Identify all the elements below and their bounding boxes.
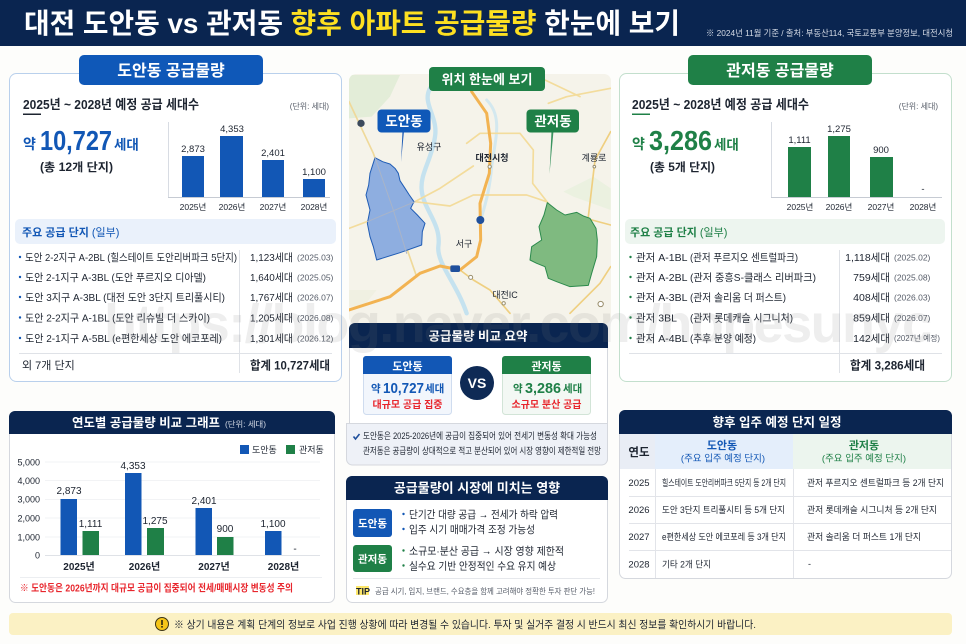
bar chart: 관저동: - — [921, 184, 925, 195]
grouped bar chart: 4,353 — [120, 461, 146, 472]
schedule rows — [628, 469, 951, 578]
list: 도안동: (2025.05) — [297, 272, 334, 282]
warning note: ※ 도안동은 2026년까지 대규모 공급이 집중되어 전세/매매시장 변동성 주의 — [20, 582, 293, 594]
map labels: 유성구 — [417, 142, 441, 152]
heading: 관저동 — [688, 55, 872, 85]
source note: ※ 2024년 11월 기준 / 출처: 부동산114, 국토교통부 분양정보, 대전시청 — [706, 28, 953, 38]
legend — [240, 445, 324, 455]
schedule rows: 도안 3단지 트리풀시티 등 5개 단지 — [662, 505, 785, 515]
tag: 관저동 — [353, 545, 392, 572]
schedule columns: (주요 입주 예정 단지) — [822, 452, 906, 464]
list heading: 관저동 — [625, 219, 945, 244]
grouped bar chart — [17, 458, 320, 573]
title banner — [0, 0, 966, 46]
list: 관저동: 408세대 — [853, 292, 890, 304]
list: 도안동: 도안 2-2지구 A-2BL (힐스테이트 도안리버파크 5단지) — [25, 251, 237, 264]
bar chart: 도안동: 2027년 — [260, 202, 286, 212]
list: 관저동: (관저 중흥S-클래스 리버파크) — [690, 271, 816, 284]
schedule rows: 2026 — [628, 505, 650, 516]
icon: warning — [156, 618, 168, 630]
list: 관저동: 142세대 — [853, 333, 890, 345]
grouped bar chart: 1,100 — [260, 519, 286, 530]
tag: 도안동: 도안동 — [358, 518, 387, 530]
list: 관저동: (2025.08) — [894, 272, 931, 282]
total: 관저동: 3,286 — [649, 125, 712, 156]
bar chart: 도안동: 2026년 — [219, 202, 245, 212]
summary header: 공급물량 비교 요약 — [429, 330, 528, 344]
card: 도안동: 세대 — [425, 382, 444, 395]
grouped bar chart: 2,000 — [17, 514, 40, 524]
card: 도안동 — [363, 356, 452, 414]
list: 도안동: (2025.03) — [297, 252, 334, 262]
bar chart: 도안동: 2,873 — [181, 144, 205, 155]
list: 관저동: 관저 A-1BL — [636, 252, 688, 264]
list: 관저동: 859세대 — [853, 312, 890, 324]
map labels: 계룡로 — [582, 152, 606, 163]
heading: 도안동: 도안동 공급물량 — [117, 62, 225, 80]
grouped bar chart: 2027년 — [198, 560, 230, 573]
list: 관저동: 관저 A-2BL — [636, 272, 688, 284]
card: 관저동: 관저동 — [531, 359, 562, 373]
watermark: https://blog.naver.com/hopesunyc — [104, 294, 932, 354]
grouped bar chart: 2,401 — [191, 496, 217, 507]
card: 관저동: 세대 — [563, 382, 582, 395]
impact text: 도안동: 단기간 대량 공급 → 전세가 하락 압력 — [409, 508, 558, 521]
callout: 도안동 — [378, 110, 430, 162]
tag: 도안동 — [353, 509, 392, 537]
card: 관저동: 약 — [513, 382, 523, 395]
subtitle: 2025년 ~ 2028년 예정 공급 세대수 — [23, 97, 199, 112]
schedule rows: 2028 — [628, 560, 650, 570]
footer notice — [9, 613, 952, 635]
schedule rows: 2025 — [628, 478, 650, 489]
grouped bar chart: 1,000 — [17, 532, 40, 542]
schedule columns: 연도 — [628, 446, 650, 459]
unit: (단위: 세대) — [899, 101, 938, 111]
callout: 도안동: 도안동 — [385, 114, 423, 129]
schedule rows: - — [808, 559, 811, 569]
list: 도안동: 1,767세대 — [250, 292, 293, 304]
list: 관저동: 759세대 — [853, 272, 890, 284]
callout: 관저동 — [526, 110, 579, 174]
total: 관저동: (총 5개 단지) — [650, 161, 715, 174]
grouped bar chart: 1,275 — [142, 516, 168, 527]
card: 관저동 — [502, 356, 591, 414]
grouped bar chart: 1,111 — [79, 519, 103, 530]
bar chart: 관저동 — [771, 122, 942, 212]
impact text: 도안동: 입주 시기 매매가격 조정 가능성 — [409, 523, 535, 536]
callout: 관저동: 관저동 — [534, 114, 572, 129]
list: 도안동: 합계 10,727세대 — [250, 358, 330, 372]
bar chart: 도안동: 2025년 — [180, 202, 206, 212]
schedule rows: 관저 롯데캐슬 시그니처 등 2개 단지 — [807, 504, 937, 515]
total: 관저동 — [632, 125, 739, 174]
schedule rows: 힐스테이트 도안리버파크 5단지 등 2개 단지 — [662, 477, 786, 488]
total: 관저동: 약 — [632, 136, 645, 152]
panel: 위치 지도 — [349, 67, 611, 324]
list: 관저동: 관저 A-4BL — [636, 333, 688, 345]
impact header — [346, 476, 608, 500]
panel: 시장 영향 — [346, 476, 608, 602]
list heading: 관저동: 주요 공급 단지 (일부) — [630, 225, 727, 239]
list: 관저동: (2026.03) — [894, 292, 931, 302]
card: 도안동: 도안동 — [392, 360, 423, 373]
bar chart: 관저동: 2025년 — [787, 202, 813, 212]
schedule header — [619, 410, 952, 434]
list heading: 도안동: 주요 공급 단지 (일부) — [22, 225, 119, 239]
bar chart: 관저동: 2027년 — [868, 202, 894, 212]
grouped bar chart: 2025년 — [63, 560, 95, 573]
subtitle: 2025년 ~ 2028년 예정 공급 세대수 — [632, 97, 809, 112]
bar chart: 관저동: 1,275 — [827, 124, 851, 135]
list: 관저동: (추후 분양 예정) — [690, 332, 756, 345]
heading: 도안동 — [79, 55, 263, 85]
list: 도안동: 1,640세대 — [250, 272, 293, 284]
list: 도안동: 도안 3지구 A-3BL (대전 도안 3단지 트리풀시티) — [25, 292, 225, 304]
card: 관저동: 소규모 분산 공급 — [512, 398, 581, 411]
map labels — [417, 142, 606, 300]
bar chart: 도안동: 4,353 — [220, 124, 244, 135]
grouped bar chart: 2026년 — [129, 560, 160, 573]
list: 관저동: 합계 3,286세대 — [850, 358, 925, 372]
card: 관저동: 3,286 — [525, 380, 561, 397]
grouped bar chart: 4,000 — [17, 476, 40, 486]
list: 관저동: 관저 A-3BL — [636, 292, 688, 304]
panel: 도안동 공급물량 — [10, 55, 342, 382]
grouped bar chart: 2028년 — [268, 560, 299, 573]
list: 도안동: (2026.12) — [297, 334, 334, 344]
legend: 도안동 — [252, 445, 277, 455]
list: 관저동: (관저 롯데캐슬 시그니처) — [690, 312, 793, 324]
total: 도안동: (총 12개 단지) — [40, 161, 113, 174]
footer text: ※ 상기 내용은 계획 단계의 정보로 사업 진행 상황에 따라 변경될 수 있습니다. 투자 및 실거주 결정 시 반드시 최신 정보를 확인하시기 바랍니다. — [174, 618, 756, 631]
card: 도안동: 10,727 — [383, 380, 424, 397]
grouped bar chart: 900 — [217, 524, 234, 535]
schedule rows: 관저 푸르지오 센트럴파크 등 2개 단지 — [807, 478, 944, 488]
grouped bar chart: 2,873 — [56, 486, 82, 497]
map labels: 대전IC — [492, 290, 518, 300]
panel: 입주 예정 일정 — [619, 410, 952, 578]
list: 관저동: (2027년 예정) — [894, 333, 940, 343]
total: 도안동 — [23, 125, 139, 174]
unit: (단위: 세대) — [290, 101, 329, 111]
list: 관저동: 1,118세대 — [845, 252, 890, 264]
summary notes: 관저동은 공급량이 상대적으로 적고 분산되어 있어 시장 영향이 제한적일 전망 — [363, 445, 601, 456]
schedule columns: 도안동 — [707, 439, 737, 452]
list: 도안동: 도안 2-2지구 A-1BL (도안 리슈빌 더 스카이) — [25, 312, 210, 324]
list: 도안동: (2026.07) — [297, 292, 334, 302]
vs badge — [460, 366, 494, 400]
schedule rows: 관저 솔리움 더 퍼스트 1개 단지 — [807, 532, 921, 542]
list: 도안동: 도안 2-1지구 A-5BL (e편한세상 도안 에코포레) — [25, 332, 222, 345]
impact header: 공급물량이 시장에 미치는 영향 — [394, 480, 560, 496]
total: 관저동: 세대 — [714, 138, 739, 152]
list: 관저동: (2026.07) — [894, 313, 931, 323]
grouped bar chart: 3,000 — [17, 494, 40, 504]
total: 도안동: 세대 — [114, 138, 139, 152]
schedule rows: 2027 — [628, 532, 650, 543]
schedule header: 향후 입주 예정 단지 일정 — [713, 414, 841, 430]
list: 도안동: 1,301세대 — [250, 333, 293, 345]
list: 관저동: (2025.02) — [894, 252, 931, 262]
grouped bar chart: 5,000 — [17, 458, 40, 468]
title: 대전 도안동 vs 관저동 향후 아파트 공급물량 한눈에 보기 — [24, 8, 680, 39]
summary notes — [346, 424, 608, 465]
list: 관저동 — [629, 250, 942, 373]
impact text: 도안동 — [402, 508, 558, 536]
impact text: 관저동: 실수요 기반 안정적인 수요 유지 예상 — [409, 560, 556, 572]
grouped bar chart: 0 — [35, 550, 40, 560]
total: 도안동: 10,727 — [40, 125, 112, 156]
impact text: 관저동: 소규모·분산 공급 → 시장 영향 제한적 — [409, 546, 564, 558]
legend: 관저동 — [299, 445, 324, 455]
vs badge: VS — [468, 375, 486, 391]
tip: 공급 시기, 입지, 브랜드, 수요층을 함께 고려해야 정확한 투자 판단 가능! — [375, 586, 595, 596]
chart header — [9, 411, 335, 434]
chart header: 연도별 공급물량 비교 그래프 — [72, 415, 220, 430]
list: 도안동: 외 7개 단지 — [22, 359, 75, 372]
schedule rows: 기타 2개 단지 — [662, 560, 711, 570]
list: 도안동 — [19, 250, 334, 373]
schedule rows: e편한세상 도안 에코포레 등 3개 단지 — [662, 531, 786, 542]
bar chart: 관저동: 2028년 — [910, 202, 936, 212]
map labels: 서구 — [456, 239, 472, 249]
card: 도안동: 대규모 공급 집중 — [373, 398, 442, 411]
grouped bar chart: - — [293, 544, 297, 555]
panel: 관저동 공급물량 — [620, 55, 952, 382]
tip: TIP — [356, 586, 370, 596]
tag: 관저동: 관저동 — [358, 552, 387, 566]
summary notes: 도안동은 2025-2026년에 공급이 집중되어 있어 전세기 변동성 확대 가능성 — [363, 430, 597, 441]
panel: 공급물량 비교 요약 — [346, 323, 608, 465]
list: 도안동: 1,123세대 — [250, 252, 293, 264]
list: 도안동: 1,205세대 — [250, 312, 293, 324]
list: 도안동: (2026.08) — [297, 313, 334, 323]
impact text: 관저동 — [402, 546, 564, 572]
bar chart: 도안동: 2028년 — [301, 202, 327, 212]
bar chart: 관저동: 2026년 — [826, 202, 852, 212]
heading: 위치 한눈에 보기 — [429, 67, 545, 91]
list: 관저동: (관저 솔리움 더 퍼스트) — [690, 292, 786, 304]
heading: 위치 한눈에 보기: 위치 한눈에 보기 — [442, 72, 532, 87]
bar chart: 도안동: 2,401 — [261, 148, 285, 159]
schedule columns — [620, 434, 951, 469]
list heading: 도안동 — [15, 219, 336, 244]
summary header — [349, 323, 608, 348]
bar chart: 도안동 — [168, 122, 330, 212]
list: 관저동: (관저 푸르지오 센트럴파크) — [690, 251, 798, 264]
map labels: 대전시청 — [475, 152, 509, 163]
chart header: (단위: 세대) — [225, 419, 266, 429]
card: 도안동: 약 — [371, 382, 381, 395]
schedule columns: (주요 입주 예정 단지) — [681, 452, 765, 464]
total: 도안동: 약 — [23, 136, 36, 152]
heading: 관저동: 관저동 공급물량 — [726, 62, 834, 80]
schedule columns: 관저동 — [849, 438, 879, 452]
bar chart: 관저동: 1,111 — [788, 135, 811, 146]
panel: 연도별 비교 그래프 — [9, 411, 335, 602]
list: 도안동: 도안 2-1지구 A-3BL (도안 푸르지오 디아델) — [25, 272, 206, 284]
bar chart: 도안동: 1,100 — [302, 167, 326, 178]
list: 관저동: 관저 3BL — [636, 312, 677, 324]
bar chart: 관저동: 900 — [873, 145, 889, 156]
